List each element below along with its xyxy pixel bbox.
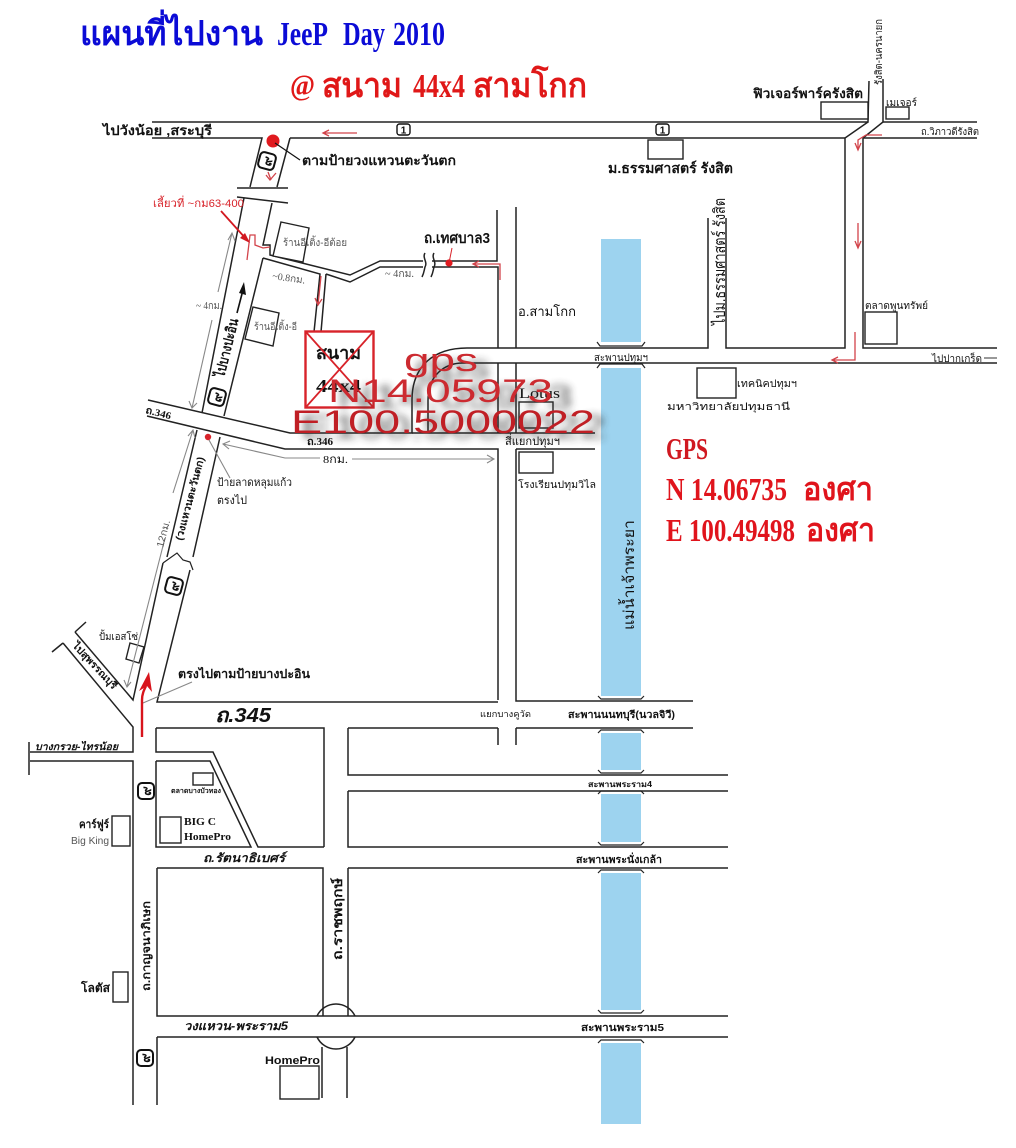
route shields: highway 1: 1 xyxy=(401,126,407,136)
subtitle: venue: สนาม xyxy=(322,68,402,105)
bridge labels xyxy=(480,709,675,1034)
subtitle: venue: 44x4 xyxy=(413,68,465,105)
top road labels: ไปม.ธรรมศาสตร์ รังสิต xyxy=(710,198,729,327)
lower left labels: ตลาดบางบัวทอง xyxy=(171,787,222,795)
subtitle: venue xyxy=(290,65,587,105)
venue: field box: 44x4 xyxy=(316,376,361,396)
river: Chao Phraya segments xyxy=(601,239,641,1124)
gps overlay shadow: E100.5000022 xyxy=(301,409,606,445)
lower left labels: Big King xyxy=(71,836,109,847)
GPS coordinates block: GPS xyxy=(666,431,708,466)
lower left labels: ถ.ราชพฤกษ์ xyxy=(330,877,345,960)
mid map labels: ป้ายลาดหลุมแก้ว xyxy=(217,477,292,489)
gps overlay text: gps xyxy=(404,342,478,378)
route shields: highway 9: ๙ xyxy=(138,1053,153,1063)
title: map heading: Day xyxy=(343,16,385,53)
gps overlay shadow: gps xyxy=(415,349,490,385)
subtitle: venue: @ xyxy=(290,69,315,102)
mid map labels: ถ.346 xyxy=(144,405,172,422)
gps overlay shadow: N14.05973 xyxy=(338,379,573,415)
bridge labels: สะพานพระราม5 xyxy=(581,1023,665,1034)
lower left labels xyxy=(35,629,345,1067)
gps overlay text: N14.05973 xyxy=(328,373,553,409)
mid map labels: ตรงไป xyxy=(217,494,247,507)
main red arrow from junction xyxy=(139,672,152,737)
mid map labels: 8กม. xyxy=(323,454,348,466)
mid map labels: ตลาดพูนทรัพย์ xyxy=(865,300,928,312)
zigzag road break xyxy=(163,553,193,570)
mid map labels: Lotus xyxy=(519,386,560,402)
top road labels: ไปวังน้อย ,สระบุรี xyxy=(101,122,212,139)
title: map heading: 2010 xyxy=(393,16,445,53)
mid map labels: ร้านอีเติ้ง-อีต้อย xyxy=(283,235,347,249)
mid map labels: 12กม. xyxy=(155,519,173,549)
lower left labels: วงแหวน-พระราม5 xyxy=(184,1019,288,1033)
route shields: highway 1 xyxy=(397,124,669,136)
bridge labels: สะพานนนทบุรี(นวลจิวี) xyxy=(568,709,675,721)
GPS coordinates block: องศา xyxy=(806,512,875,548)
top road labels: ฟิวเจอร์พาร์ครังสิต xyxy=(753,86,863,101)
bridge brackets xyxy=(597,342,645,1043)
lower left labels: HomePro xyxy=(265,1055,320,1067)
lower left labels: ถ.รัตนาธิเบศร์ xyxy=(203,851,288,865)
mid map labels xyxy=(144,230,997,630)
gps overlay shadow xyxy=(301,349,606,445)
mid map labels: ไปบางปะอิน xyxy=(210,316,242,380)
route shields: highway 9: ๙ xyxy=(166,579,183,593)
route shields: highway 1: 1 xyxy=(660,126,666,136)
gps overlay text: E100.5000022 xyxy=(291,404,595,440)
mid map labels: ร้านอีเติ้ง-อี xyxy=(254,319,297,333)
venue: field box: สนาม xyxy=(316,343,361,363)
red route arrows xyxy=(247,130,882,363)
bridge labels: แยกบางคูวัด xyxy=(480,709,531,720)
mid map labels: (วงแหวนตะวันตก) xyxy=(173,456,207,542)
mid map labels: อ.สามโกก xyxy=(518,304,576,319)
top road labels xyxy=(101,19,979,327)
venue: field box xyxy=(306,332,374,408)
top road labels: ถ.วิภาวดีรังสิต xyxy=(921,126,979,138)
top road labels: รังสิต-นครนายก xyxy=(874,19,885,85)
lower left labels: คาร์ฟูร์ xyxy=(79,818,109,832)
lower left labels: BIG C xyxy=(184,817,216,828)
top road labels: ตามป้ายวงแหวนตะวันตก xyxy=(302,153,456,168)
lower left labels: ตรงไปตามป้ายบางปะอิน xyxy=(178,666,311,681)
subtitle: venue: สามโกก xyxy=(473,65,587,105)
grey distance arrows xyxy=(124,233,494,703)
mid map labels: มหาวิทยาลัยปทุมธานี xyxy=(667,401,790,413)
lower left labels: โลตัส xyxy=(80,980,111,995)
top road labels: เลี้ยวที่ ~กม63-400 xyxy=(153,195,244,210)
GPS coordinates block: E 100.49498 xyxy=(666,512,795,548)
turn pointer: bold red arrow xyxy=(221,211,250,243)
title: map heading: แผนที่ไปงาน xyxy=(80,9,263,53)
mid map labels: แม่น้ำเจ้าพระยา xyxy=(618,520,638,630)
GPS coordinates block: N 14.06735 xyxy=(666,471,787,507)
red marker dots xyxy=(205,134,453,440)
building boxes xyxy=(112,102,909,1099)
lower left labels: ถ.กาญจนาภิเษก xyxy=(140,901,153,991)
black direction arrow xyxy=(237,282,246,313)
lower left labels: HomePro xyxy=(184,832,231,843)
route shields: highway 9 xyxy=(137,151,277,1066)
mid map labels: โรงเรียนปทุมวิไล xyxy=(518,478,596,491)
title: map heading xyxy=(80,9,445,53)
gps overlay text xyxy=(291,342,595,440)
bridge labels: สะพานพระนั่งเกล้า xyxy=(576,852,662,866)
lower left labels: ถ.345 xyxy=(215,705,272,727)
mid map labels: ไปปากเกร็ด xyxy=(931,351,982,365)
mid map labels: สี่แยกปทุมฯ xyxy=(505,433,560,448)
top road labels: ม.ธรรมศาสตร์ รังสิต xyxy=(608,160,733,176)
title: map heading: JeeP xyxy=(277,16,328,53)
mid map labels: ถ.346 xyxy=(307,437,333,448)
mid map labels: ถ.เทศบาล3 xyxy=(424,230,490,247)
mid map labels: ~0.8กม. xyxy=(272,271,306,287)
route shields: highway 9: ๙ xyxy=(139,786,154,796)
lower left labels: ไปสุพรรณบุรี xyxy=(69,638,121,692)
bridge labels: สะพานพระราม4 xyxy=(588,780,653,789)
lower left labels: ปั้มเอสโซ่ xyxy=(99,629,138,643)
mid map labels: สะพานปทุมฯ xyxy=(594,353,648,364)
route shields: highway 9: ๙ xyxy=(259,154,276,168)
top road labels: เมเจอร์ xyxy=(886,97,918,109)
GPS coordinates block xyxy=(666,431,875,548)
lower left labels: บางกรวย-ไทรน้อย xyxy=(35,740,119,753)
mid map labels: เทคนิคปทุมฯ xyxy=(737,379,797,390)
GPS coordinates block: องศา xyxy=(803,471,873,507)
mid map labels: ~ 4กม. xyxy=(385,269,414,280)
route shields: highway 9: ๙ xyxy=(209,390,226,404)
mid map labels: ~ 4กม. xyxy=(196,301,222,312)
